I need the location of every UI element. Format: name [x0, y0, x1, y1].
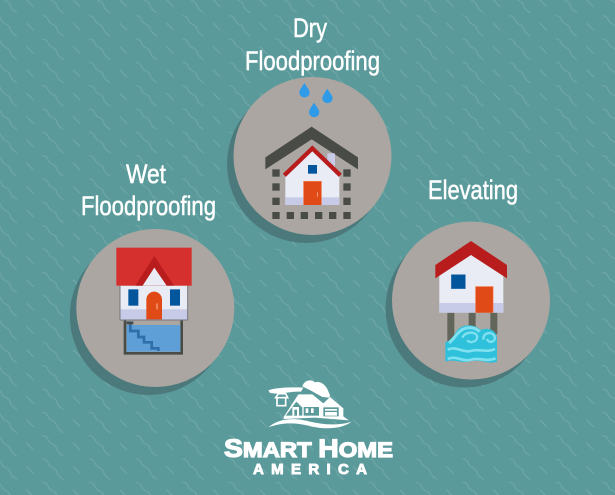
left canopy — [268, 387, 303, 394]
heading: Wet Floodproofing: Wet — [126, 159, 166, 189]
logo: Smart Home America — [224, 380, 393, 478]
house — [116, 248, 192, 320]
outer roof — [265, 127, 358, 169]
heading: Dry Floodproofing: Floodproofing — [245, 46, 380, 76]
house — [284, 148, 340, 205]
logo mark — [268, 380, 352, 428]
logo: Smart Home America: AMERICA — [253, 461, 367, 478]
icon: wet floodproofed house — [116, 248, 192, 353]
icon: water drops — [299, 83, 333, 117]
barrier blocks — [272, 169, 351, 219]
heading: Dry Floodproofing: Dry — [293, 13, 327, 43]
gazebo — [276, 394, 288, 406]
heading: Dry Floodproofing — [245, 13, 380, 76]
panel: wet floodproofing — [70, 229, 234, 395]
heading: Elevating: Elevating — [428, 175, 518, 205]
icon: flood wave — [445, 325, 497, 363]
icon: dry floodproofed house — [265, 83, 358, 219]
panel: elevating — [386, 222, 550, 388]
logo text: SMART HOME — [224, 435, 393, 463]
heading: Wet Floodproofing: Floodproofing — [81, 191, 216, 221]
swoosh — [268, 419, 352, 428]
panel: dry floodproofing — [227, 77, 392, 243]
heading: Wet Floodproofing — [81, 159, 216, 221]
house — [284, 394, 349, 420]
cloud and trees — [302, 380, 330, 398]
basement — [125, 320, 182, 353]
house — [435, 241, 507, 313]
stilts — [447, 313, 497, 343]
icon: elevated house — [435, 241, 507, 363]
